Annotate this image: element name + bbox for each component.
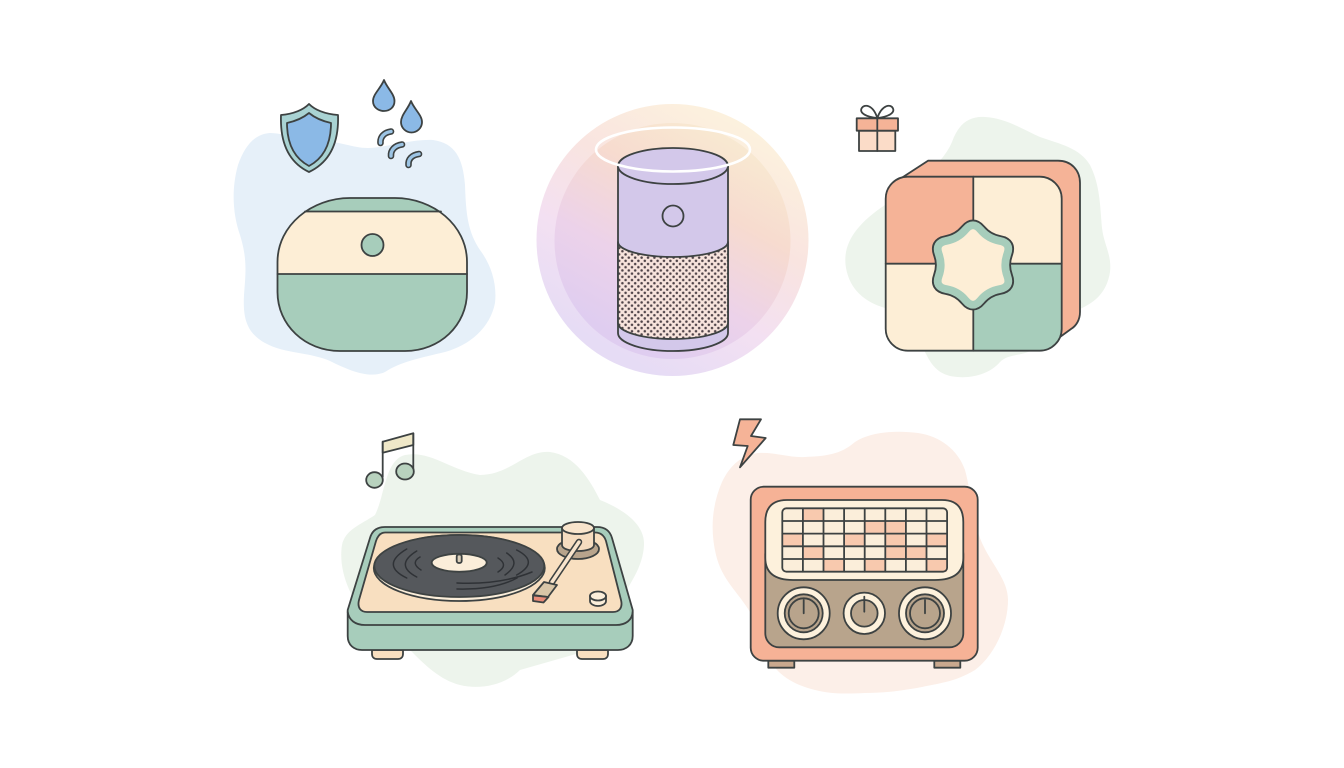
icon: lightning bolt [733,419,766,467]
panel: humidifier device [234,80,495,375]
panel: gift smart box [845,106,1110,377]
icon: gift [857,106,898,151]
tonearm [533,522,599,602]
control panel [765,540,963,647]
radio feet [768,661,960,668]
radio body [751,487,978,661]
middle dial [844,593,885,634]
peach background blob [713,432,1008,694]
icon: water drops [373,80,422,132]
left dial [778,587,830,639]
humidifier body [278,198,467,351]
icon: mist arcs [380,132,419,165]
icon: shield [281,104,338,172]
speaker body [618,148,728,351]
box back side [903,161,1080,337]
vinyl record [374,535,545,601]
icon: music notes [366,433,414,488]
star ring [938,225,1008,305]
feet [372,650,608,659]
panel: smart speaker [536,104,808,376]
small knob [590,592,606,606]
turntable base [348,527,633,650]
box front quadrants [886,177,1062,351]
green background blob [845,117,1110,377]
gradient halo circles [536,104,808,376]
tuner display [765,500,963,580]
right dial [899,587,951,639]
blue background blob [234,133,495,375]
panel: retro radio [713,419,1008,694]
white light ring [596,128,750,172]
panel: turntable [341,433,644,687]
green background blob [341,452,644,687]
